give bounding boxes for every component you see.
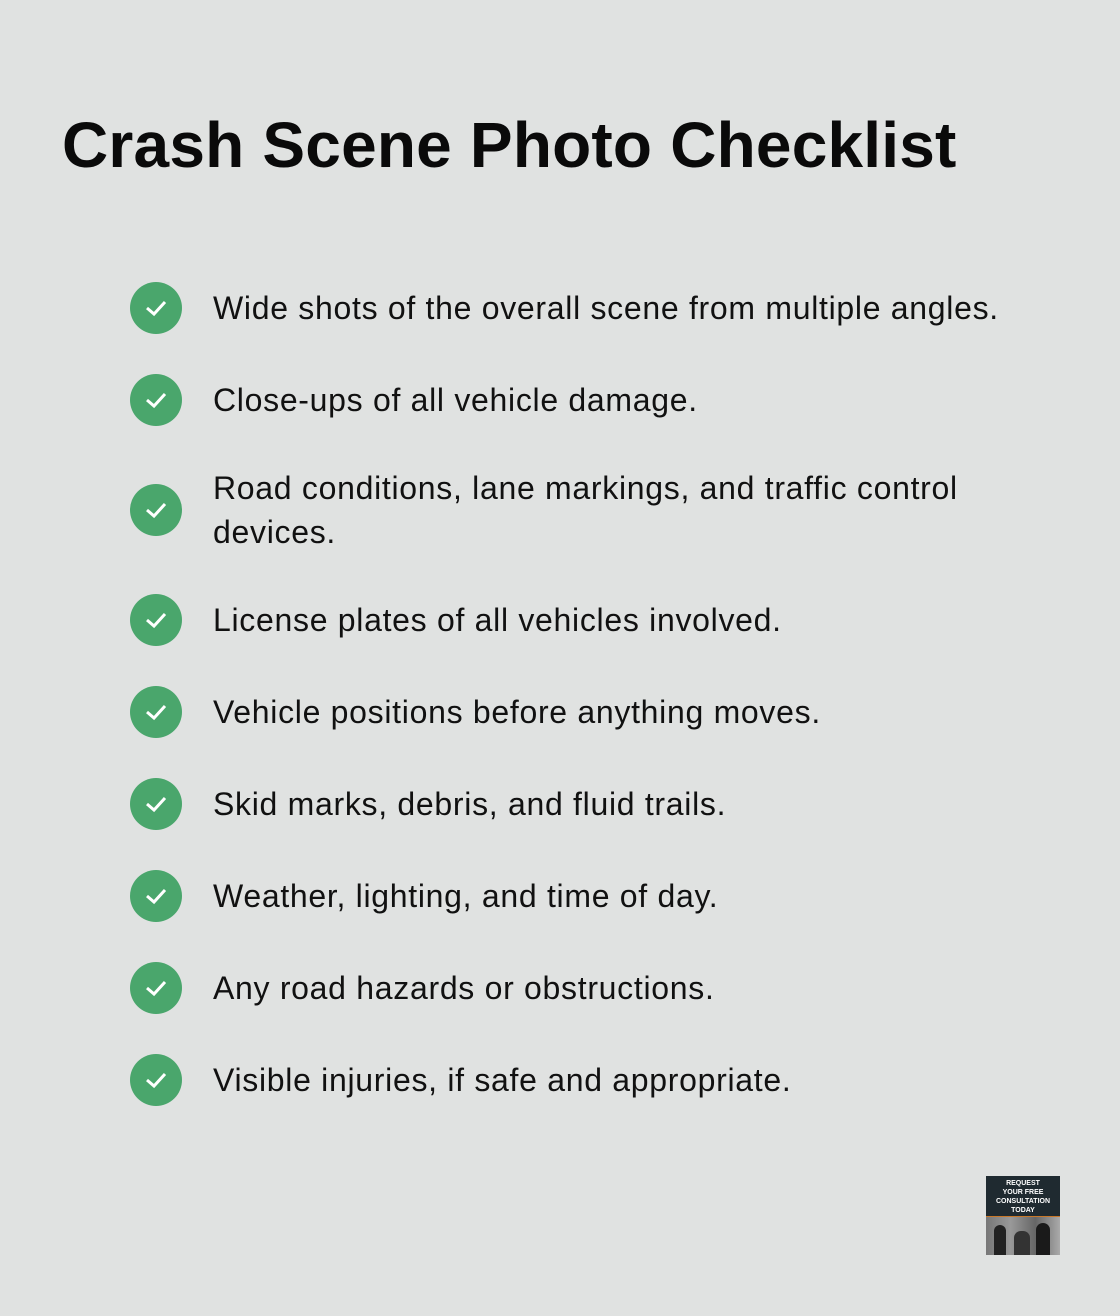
title: Crash Scene Photo Checklist xyxy=(62,109,957,181)
logo badge: CONSULTATION xyxy=(996,1198,1050,1205)
item 8 xyxy=(130,962,715,1014)
item 2: Close-ups of all vehicle damage. xyxy=(213,382,698,418)
item 1 xyxy=(130,282,999,334)
item 7: Weather, lighting, and time of day. xyxy=(213,878,718,914)
item 2 xyxy=(130,374,698,426)
logo badge xyxy=(986,1176,1060,1255)
item 7 xyxy=(130,870,718,922)
item 6 xyxy=(130,778,726,830)
item 9: Visible injuries, if safe and appropriate. xyxy=(213,1062,791,1098)
logo badge: REQUEST xyxy=(1006,1180,1040,1187)
item 5 xyxy=(130,686,821,738)
item 5: Vehicle positions before anything moves. xyxy=(213,694,821,730)
item 9 xyxy=(130,1054,791,1106)
item 4: License plates of all vehicles involved. xyxy=(213,602,782,638)
item 3: Road conditions, lane markings, and traffic control devices. xyxy=(213,470,958,550)
item 6: Skid marks, debris, and fluid trails. xyxy=(213,786,726,822)
item 4 xyxy=(130,594,782,646)
item 8: Any road hazards or obstructions. xyxy=(213,970,715,1006)
logo badge: YOUR FREE xyxy=(1003,1189,1043,1196)
logo badge: TODAY xyxy=(1011,1207,1035,1214)
item 1: Wide shots of the overall scene from multiple angles. xyxy=(213,290,999,326)
